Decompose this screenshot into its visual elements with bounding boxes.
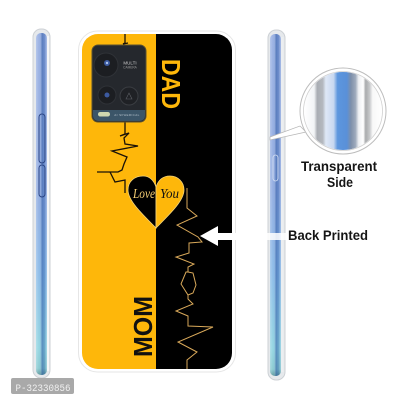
case back print xyxy=(78,30,386,380)
lens: second xyxy=(98,86,116,104)
label: Transparent Side: Transparent xyxy=(301,158,377,174)
label: Transparent Side: Side xyxy=(327,174,353,190)
arrow: back printed xyxy=(200,226,288,246)
label: Back Printed: Back Printed xyxy=(288,227,368,243)
camera module xyxy=(92,45,146,122)
lens: main xyxy=(94,53,118,77)
heading: DAD: DAD xyxy=(156,59,186,109)
product id badge: P-32330856 xyxy=(16,383,70,395)
camera module: AI SPHERICAL xyxy=(114,113,140,117)
heart with Love You xyxy=(128,176,184,228)
heart with Love You: You xyxy=(160,187,179,202)
camera module: MULTI xyxy=(123,60,137,66)
left phone side view xyxy=(33,29,50,378)
side buttons xyxy=(39,114,45,197)
magnifier callout: transparent side xyxy=(270,68,386,154)
heartbeat line: dad side xyxy=(176,188,213,370)
right phone side view xyxy=(268,30,285,380)
camera module: CAMERA xyxy=(123,66,138,70)
label: Transparent Side xyxy=(301,158,377,190)
heart with Love You: Love xyxy=(132,187,155,202)
lens: third xyxy=(120,87,138,105)
product id badge xyxy=(11,378,74,395)
heading: MOM: MOM xyxy=(128,296,158,357)
heartbeat line: mom side xyxy=(97,34,138,193)
